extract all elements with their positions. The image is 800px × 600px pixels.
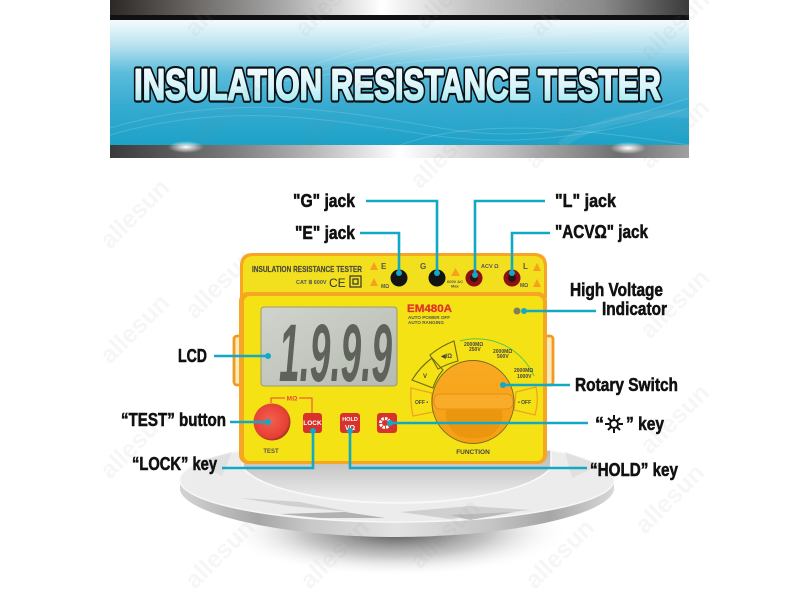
watermark: allesun — [404, 494, 485, 574]
watermark: allesun — [634, 264, 715, 344]
high voltage LED — [514, 308, 520, 314]
model notes: AUTO RANGING — [408, 320, 444, 325]
callout: L jack — [472, 191, 617, 278]
platform inner cylinder — [243, 450, 551, 503]
hold key — [340, 413, 360, 433]
lock key: LOCK — [303, 420, 322, 427]
jack E — [390, 270, 408, 286]
watermark: allesun — [94, 289, 175, 369]
dial labels: 2000MΩ — [514, 368, 533, 374]
model notes: AUTO POWER OFF — [408, 315, 450, 320]
banner blue background — [110, 20, 689, 145]
tester device: 1.9.9.9 — [279, 308, 392, 399]
double insulation mark — [350, 276, 361, 287]
callout: rotary switch — [500, 375, 678, 395]
watermark: allesun — [294, 514, 375, 594]
platform top surface — [180, 438, 614, 522]
watermark — [94, 0, 715, 594]
jack G — [428, 270, 446, 286]
banner black line — [110, 15, 689, 20]
watermark: allesun — [634, 94, 715, 174]
dial scale — [411, 341, 537, 416]
platform shadow — [225, 485, 569, 577]
knob pointer bar — [434, 394, 513, 409]
top panel title: INSULATION RESISTANCE TESTER — [252, 264, 362, 274]
callout: test button: “TEST” button — [121, 410, 226, 430]
callout: rotary switch: Rotary Switch — [575, 375, 678, 395]
dial labels: 2000MΩ — [464, 342, 483, 348]
callout: G jack: "G" jack — [293, 191, 356, 211]
test button — [254, 404, 290, 440]
dial labels — [415, 342, 533, 406]
banner sparkle right — [610, 142, 646, 154]
callout: LCD: LCD — [178, 346, 207, 366]
jack labels — [381, 262, 528, 290]
jack labels: MΩ — [381, 284, 389, 290]
callout: E jack: "E" jack — [295, 223, 356, 243]
CE mark: CE — [329, 276, 346, 290]
lock key — [303, 413, 322, 433]
callout: lock key: “LOCK” key — [132, 454, 217, 474]
hold key: VΩ — [345, 425, 356, 432]
warning triangles — [370, 262, 541, 287]
left handle — [234, 336, 244, 385]
dial labels: 1000V — [517, 374, 532, 380]
backlight key — [377, 413, 397, 433]
watermark: allesun — [184, 74, 265, 154]
front panel — [239, 292, 547, 464]
banner wave pattern — [110, 20, 689, 145]
front panel face — [244, 296, 543, 461]
jack ACV — [466, 270, 482, 286]
model notes — [408, 315, 450, 325]
callout: high voltage indicator: Indicator — [602, 299, 667, 319]
watermark: allesun — [519, 94, 600, 174]
watermark: allesun — [94, 404, 175, 484]
model name: EM480A — [407, 303, 452, 315]
dial green arc — [460, 339, 534, 376]
MΩ label: MΩ — [287, 396, 297, 402]
cat rating: CAT Ⅲ 600V — [296, 279, 327, 286]
watermark: allesun — [94, 174, 175, 254]
callout: lock key — [132, 428, 316, 474]
banner bottom metal strip — [110, 145, 689, 158]
watermark: allesun — [179, 244, 260, 324]
top panel — [240, 253, 547, 298]
dial labels: 500V — [497, 354, 509, 360]
platform side — [180, 480, 614, 537]
jack labels: L — [523, 262, 528, 271]
watermark: allesun — [179, 514, 260, 594]
jack labels: MΩ — [520, 283, 528, 289]
MΩ bracket — [271, 398, 312, 413]
watermark: allesun — [519, 514, 600, 594]
glass platform — [180, 438, 614, 577]
jack labels: Max — [451, 284, 460, 288]
jack labels: E — [381, 262, 387, 271]
banner top metal strip — [110, 0, 689, 16]
platform facets — [195, 452, 600, 520]
callout: ACV jack: "ACVΩ" jack — [555, 222, 649, 242]
top panel face — [243, 256, 544, 296]
jack labels: ACV Ω — [481, 264, 499, 270]
callout: E jack — [295, 223, 402, 276]
knob recess — [446, 410, 502, 438]
dial labels: ◀/Ω — [440, 353, 452, 360]
callout: G jack — [293, 191, 440, 276]
callout: high voltage indicator — [521, 280, 667, 319]
dial labels: 2000MΩ — [493, 349, 512, 355]
jack labels: 600V AC — [447, 279, 463, 284]
test label: TEST — [263, 449, 279, 455]
callout: backlight key — [387, 414, 664, 434]
jack labels: G — [420, 262, 426, 271]
callout: backlight key: ” key — [626, 414, 664, 434]
banner — [110, 0, 689, 158]
callout: L jack: "L" jack — [555, 191, 617, 211]
dial labels: OFF • — [415, 400, 428, 406]
callout: LCD — [178, 346, 271, 366]
callout: hold key — [347, 428, 678, 480]
callout: backlight key: “ — [595, 414, 604, 434]
jack L — [504, 270, 520, 286]
dial labels: • OFF — [518, 400, 531, 406]
callout: high voltage indicator: High Voltage — [570, 280, 663, 300]
rotary knob — [432, 360, 514, 444]
watermark: allesun — [629, 459, 710, 539]
callout: ACV jack — [509, 222, 649, 276]
dial labels: V — [423, 374, 427, 380]
watermark: allesun — [404, 114, 485, 194]
right handle — [543, 336, 553, 385]
callout: hold key: “HOLD” key — [590, 460, 678, 480]
watermark: allesun — [634, 379, 715, 459]
dial labels: 250V — [469, 347, 481, 353]
watermark: allesun — [294, 74, 375, 154]
banner sparkle left — [168, 141, 204, 153]
LCD screen — [261, 307, 397, 386]
function label: FUNCTION — [456, 449, 490, 456]
hold key: HOLD — [342, 417, 358, 423]
tester device — [234, 253, 553, 464]
